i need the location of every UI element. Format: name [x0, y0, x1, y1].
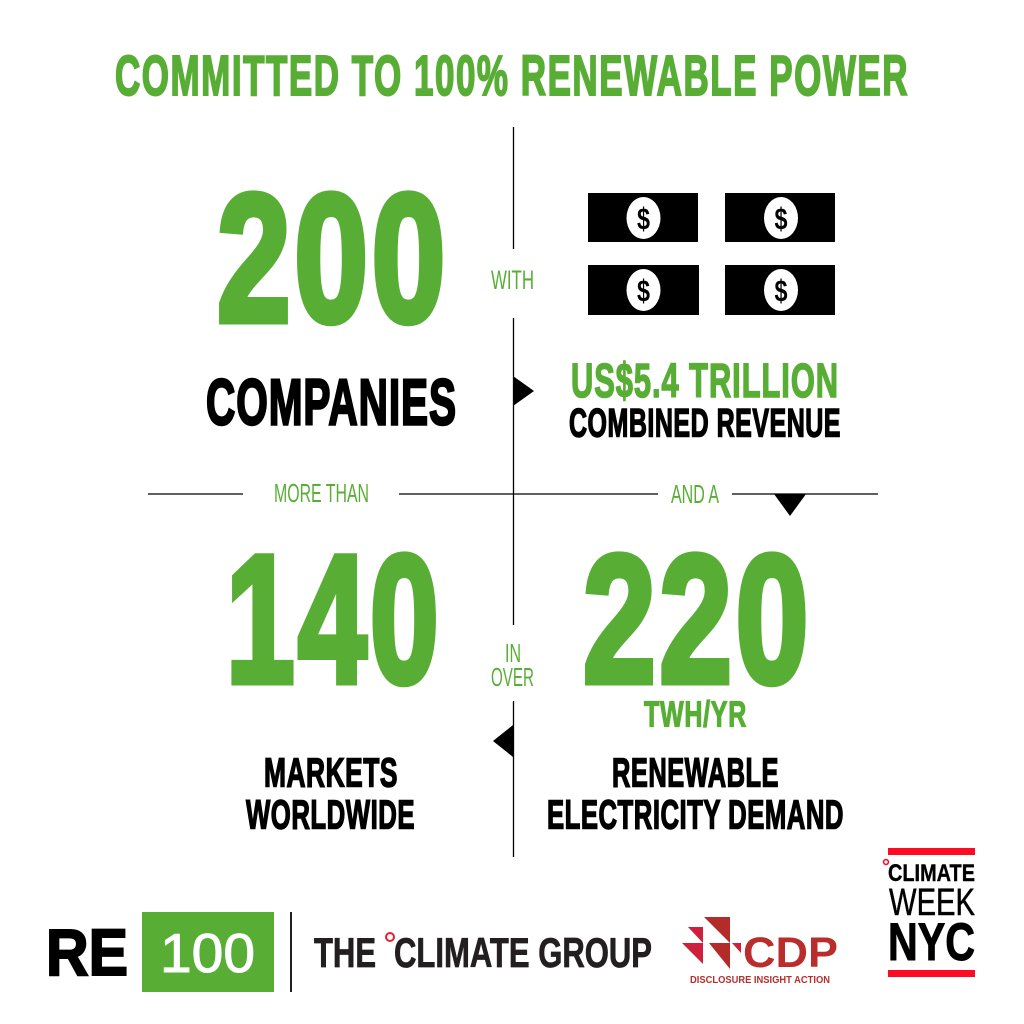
- logo: CDP: DISCLOSURE INSIGHT ACTION: [690, 975, 830, 986]
- icon: banknotes: $: [637, 201, 650, 236]
- connector: more than: MORE THAN: [274, 478, 369, 508]
- panel: revenue: [569, 193, 841, 446]
- label: renewable electricity demand: ELECTRICITY DEMAND: [547, 792, 844, 838]
- icon: banknotes: $: [774, 273, 788, 308]
- logo divider: [290, 912, 292, 992]
- label: companies: COMPANIES: [206, 366, 457, 438]
- stat: revenue amount: US$5.4 TRILLION: [571, 355, 839, 408]
- logo: Climate Week NYC: CLIMATE: [888, 860, 975, 887]
- panel: markets: [226, 517, 442, 838]
- logo: CDP: CDP: [743, 929, 838, 977]
- stat: 220: 220: [583, 517, 812, 721]
- arrow: right: [513, 376, 534, 406]
- logo: The Climate Group: THE: [314, 929, 376, 976]
- label: markets worldwide: [246, 750, 415, 838]
- label: markets worldwide: MARKETS: [264, 750, 398, 796]
- arrow: left: [493, 725, 513, 757]
- panel: electricity demand: [547, 517, 844, 838]
- connector: with: WITH: [491, 265, 534, 295]
- label: combined revenue: COMBINED REVENUE: [569, 402, 841, 446]
- label: markets worldwide: WORLDWIDE: [246, 792, 415, 838]
- logo: RE100: [46, 912, 274, 992]
- icon: banknotes: $: [637, 273, 650, 308]
- connector: in over: OVER: [491, 662, 534, 692]
- label: renewable electricity demand: [547, 750, 844, 838]
- arrow: down: [774, 494, 806, 516]
- unit: TWh per year: TWH/YR: [644, 694, 747, 734]
- logo: CDP: [682, 917, 838, 986]
- logo: The Climate Group: [314, 929, 652, 976]
- label: renewable electricity demand: RENEWABLE: [612, 750, 779, 796]
- connector: in over: [491, 638, 534, 692]
- logo: Climate Week NYC: NYC: [888, 913, 975, 972]
- logo: Climate Week NYC: [884, 848, 975, 977]
- logo: RE100: RE: [46, 915, 128, 989]
- panel: companies: [206, 156, 457, 438]
- stat: 140: 140: [226, 517, 442, 721]
- logo: The Climate Group: CLIMATE GROUP: [394, 929, 652, 976]
- stat: 200: 200: [217, 156, 449, 360]
- icon: banknotes: $: [774, 201, 788, 236]
- connector: in over: IN: [505, 638, 521, 668]
- logo: Climate Week NYC: WEEK: [889, 882, 975, 924]
- connector: and a: AND A: [671, 479, 719, 509]
- icon: banknotes: [588, 193, 835, 315]
- logo: RE100: 100: [160, 922, 255, 984]
- divider lines: [148, 127, 878, 857]
